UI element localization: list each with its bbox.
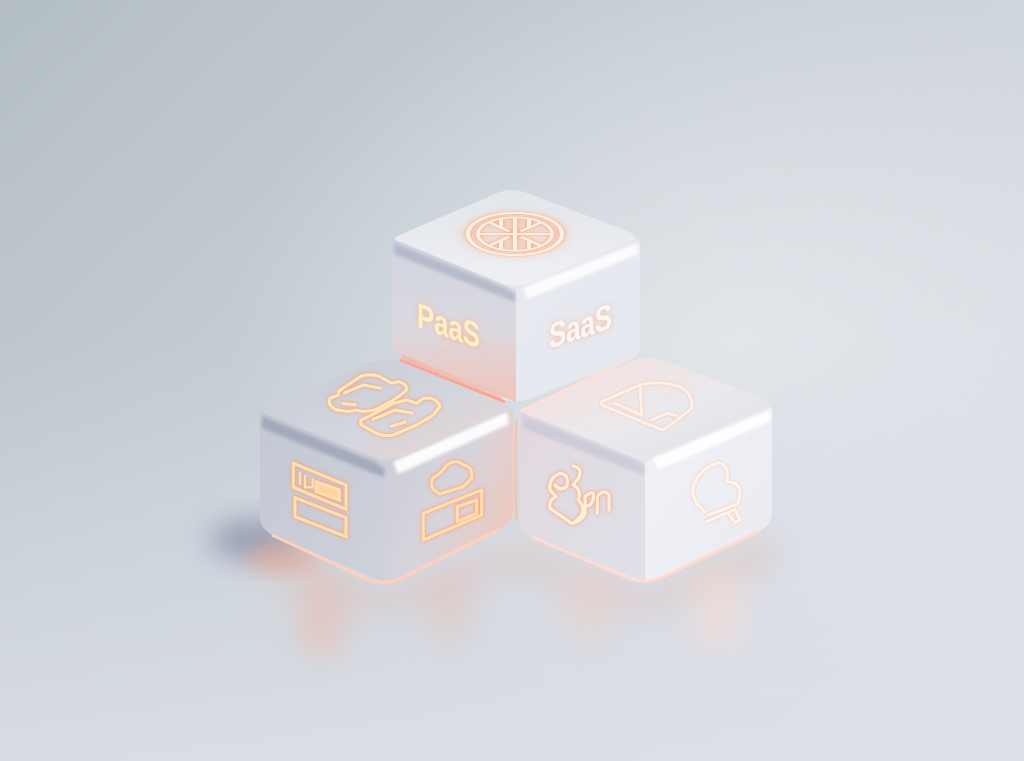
floor shadows and reflections (210, 523, 775, 660)
icon: cloud storage (423, 462, 482, 540)
label: PaaS: PaaS (417, 295, 480, 356)
left cube faces (260, 359, 513, 582)
cube: right (padlock, app, cloud) (515, 358, 772, 582)
icon: globe wheel (468, 213, 562, 255)
cube: left (servers, infrastructure, cloud) (260, 359, 513, 582)
icon: padlock (602, 383, 692, 430)
top cube faces (392, 190, 640, 402)
icon: server panel (293, 463, 346, 537)
icon: chat cloud (693, 463, 740, 523)
icon: linked servers (329, 375, 440, 436)
cube: top (globe, PaaS, SaaS) (392, 190, 640, 402)
right cube faces (515, 358, 772, 582)
icon: app (550, 466, 609, 523)
label: SaaS: SaaS (549, 295, 612, 357)
